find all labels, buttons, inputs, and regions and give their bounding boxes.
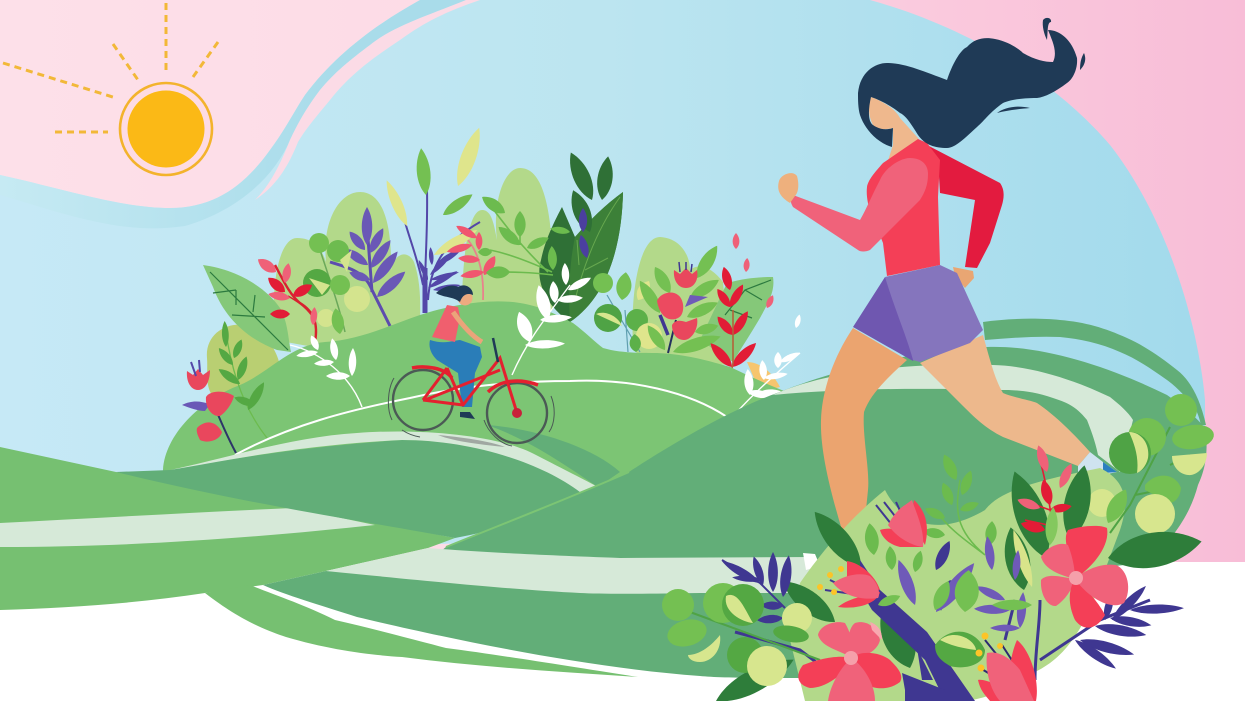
bouquet: green sprig centre [863,452,998,573]
bouquet: purple fern right [1040,583,1184,672]
plant: coral sprig [446,223,499,300]
sun [3,3,218,175]
rider: shirt [432,305,460,342]
pale running road [773,365,1133,472]
cyclist on red bicycle [388,285,554,447]
bouquet: red sprig [1008,444,1075,589]
runner: torso [867,139,940,276]
plant: small sprig on left hill with red flowers [182,321,268,453]
main light green hill [163,301,790,490]
dark hill under cycling path [116,440,580,538]
pale road on left hill [0,508,375,547]
runner: back arm [927,145,1004,268]
plant: green sprig [478,192,571,279]
background: thin pink ribbon [255,0,480,200]
bike: shadow [438,435,505,447]
runner: front arm [791,158,928,252]
left mid-tone hill [0,447,455,610]
runner: hair flecks [997,18,1085,113]
bouquet: white flowers behind [803,553,820,570]
runner: shoe [1078,452,1117,480]
bike: frame [412,338,538,413]
bouquet: eucalyptus right [1088,394,1215,534]
background: blue sky blob [0,0,1205,560]
runner [778,18,1117,540]
plant: tall purple stem with grasses [382,125,486,313]
rider: head and hair [436,285,473,306]
bouquet: top tulip [876,500,927,547]
bouquet: bottom tulip [976,632,1037,701]
bouquet: purple fern left [720,552,820,665]
bouquet: big hibiscus right [1041,526,1128,628]
pale cycling path [170,431,598,492]
dark patch right of cycling path [487,425,620,487]
runner: face and neck [869,97,925,170]
plant: purple fern [330,207,409,326]
thin light ridge line between hills [446,472,629,547]
plant: red sprig [255,255,318,342]
plant: dark broad leaf [539,149,623,322]
lower dark green swoop [263,571,830,678]
plant: eucalyptus by the fern [303,233,370,335]
plant: right cluster with eucalyptus, flowers and red sprig [593,233,802,407]
bike: wheels [388,370,554,446]
back bushes [207,168,730,410]
rider: arm [453,312,482,342]
bouquet: central purple branch [860,536,1040,701]
runner: front leg [920,335,1090,466]
bouquet: left tulip [817,561,880,608]
rider: jeans [429,340,482,407]
back hill ring on the right [983,319,1206,425]
runner: hand [778,173,798,203]
bottom light green swoop [205,585,638,677]
pale road across foreground [326,548,815,594]
runner: shorts [853,265,983,362]
bouquet: dark green leaves [711,463,1205,701]
runner: back leg [821,328,907,540]
bouquet: green leaves centre [876,569,1032,667]
rider: shoe [460,412,475,419]
background: blue ribbon [0,0,466,228]
bouquet: light green base [790,468,1125,701]
runner: hand on hip [953,267,974,288]
foreground bouquet [662,394,1215,701]
bouquet: eucalyptus left [662,583,820,686]
bouquet: big hibiscus bottom [798,622,901,701]
plant: large pale leaf left [203,265,291,352]
big dark green hill in foreground [430,347,1207,600]
white sprigs and path line on the hill [235,263,801,455]
runner: hair [858,30,1077,148]
